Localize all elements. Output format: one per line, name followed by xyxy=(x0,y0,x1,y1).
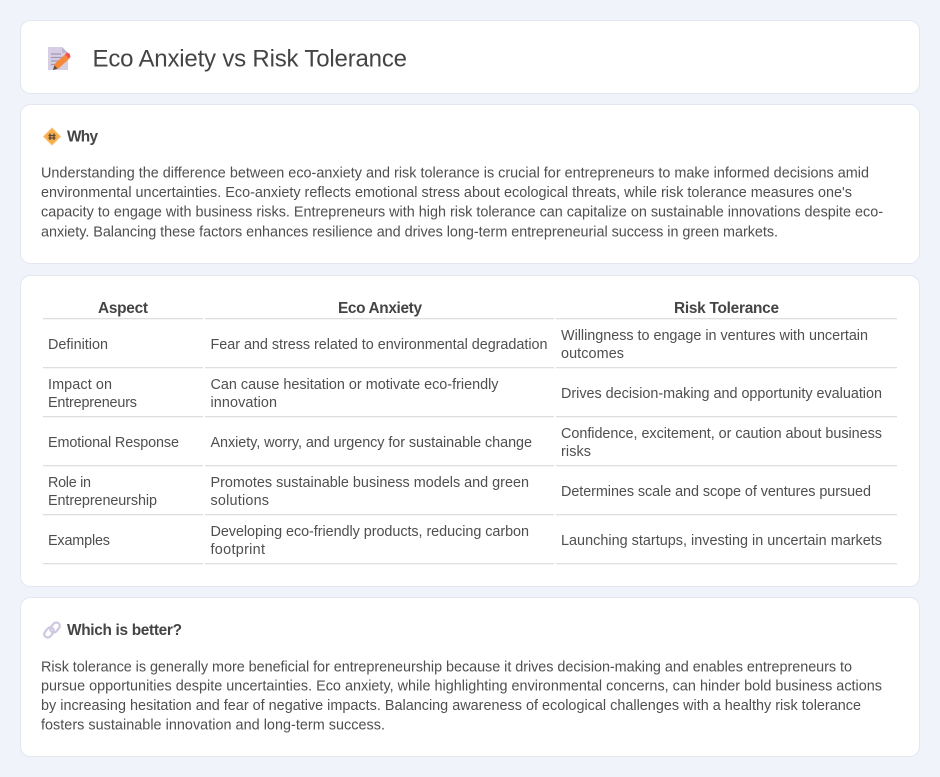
row: examples xyxy=(48,524,882,558)
row: emotional response: Confidence, excitement, or caution about business xyxy=(561,426,882,442)
icon: chain link xyxy=(43,621,61,639)
row: emotional response: Emotional Response xyxy=(48,435,179,451)
text block: why paragraph: anxiety. Balancing these factors enhances resilience and drives long-term entrepreneurial success in green markets. xyxy=(41,224,778,240)
row: examples: Developing eco-friendly products, reducing carbon xyxy=(210,524,529,540)
text block: which is better paragraph: pursue opportunities despite uncertainties. Eco anxiety, while highlighting environmental concerns, can hinder bold business actions xyxy=(41,678,882,694)
table header row: Risk Tolerance xyxy=(674,300,779,317)
text block: why paragraph: Understanding the difference between eco-anxiety and risk tolerance is crucial for entrepreneurs to make informed decisions amid xyxy=(41,166,869,182)
row: role in entrepreneurship xyxy=(48,475,871,509)
row: definition: outcomes xyxy=(561,346,624,362)
row: role in entrepreneurship: Role in xyxy=(48,475,91,491)
row: definition: Fear and stress related to environmental degradation xyxy=(210,337,548,353)
row: examples: footprint xyxy=(210,542,265,558)
row: role in entrepreneurship: solutions xyxy=(210,493,269,509)
row: examples: Examples xyxy=(48,533,110,549)
table header row: Aspect xyxy=(98,300,148,317)
row: role in entrepreneurship: Promotes sustainable business models and green xyxy=(210,475,529,491)
panel: which is better xyxy=(20,598,920,756)
panel: comparison table xyxy=(20,276,920,586)
text block: which is better paragraph: fosters sustainable innovation and long-term success. xyxy=(41,718,385,734)
table rules xyxy=(43,318,897,564)
text block: why paragraph xyxy=(41,166,883,240)
icon: diamond warning sign xyxy=(44,128,60,145)
row: emotional response xyxy=(48,426,882,460)
row: definition xyxy=(48,328,868,362)
row: definition: Willingness to engage in ventures with uncertain xyxy=(561,328,868,344)
title: Eco Anxiety vs Risk Tolerance xyxy=(92,46,407,73)
heading: which is better: Which is better? xyxy=(67,622,182,639)
row: impact on entrepreneurs xyxy=(48,377,882,411)
row: examples: Launching startups, investing in uncertain markets xyxy=(561,533,882,549)
text block: which is better paragraph: by increasing hesitation and fear of negative impacts. Balancing awareness of ecological challenges with a healthy risk tolerance xyxy=(41,698,861,714)
row: impact on entrepreneurs: Drives decision-making and opportunity evaluation xyxy=(561,386,882,402)
text block: which is better paragraph: Risk tolerance is generally more beneficial for entrepreneurship because it drives decision-making and enables entrepreneurs to xyxy=(41,659,852,675)
table header row: Eco Anxiety xyxy=(338,300,422,317)
text block: why paragraph: environmental uncertainties. Eco-anxiety reflects emotional stress about ecological threats, while risk tolerance measures one's xyxy=(41,185,852,201)
text block: why paragraph: capacity to engage with business risks. Entrepreneurs with high risk tolerance can capitalize on sustainable innovations despite eco- xyxy=(41,205,883,221)
panel: header xyxy=(20,20,920,94)
row: emotional response: Anxiety, worry, and urgency for sustainable change xyxy=(210,435,532,451)
table header row xyxy=(98,300,779,317)
row: impact on entrepreneurs: innovation xyxy=(210,395,277,411)
row: impact on entrepreneurs: Impact on xyxy=(48,377,112,393)
row: definition: Definition xyxy=(48,337,108,353)
row: impact on entrepreneurs: Entrepreneurs xyxy=(48,395,137,411)
row: role in entrepreneurship: Entrepreneurship xyxy=(48,493,157,509)
row: emotional response: risks xyxy=(561,444,591,460)
row: role in entrepreneurship: Determines scale and scope of ventures pursued xyxy=(561,484,871,500)
row: impact on entrepreneurs: Can cause hesitation or motivate eco-friendly xyxy=(210,377,499,393)
panel: why xyxy=(20,104,920,264)
heading: why: Why xyxy=(67,129,98,146)
text block: which is better paragraph xyxy=(41,659,882,734)
icon: document with pencil xyxy=(48,47,70,70)
